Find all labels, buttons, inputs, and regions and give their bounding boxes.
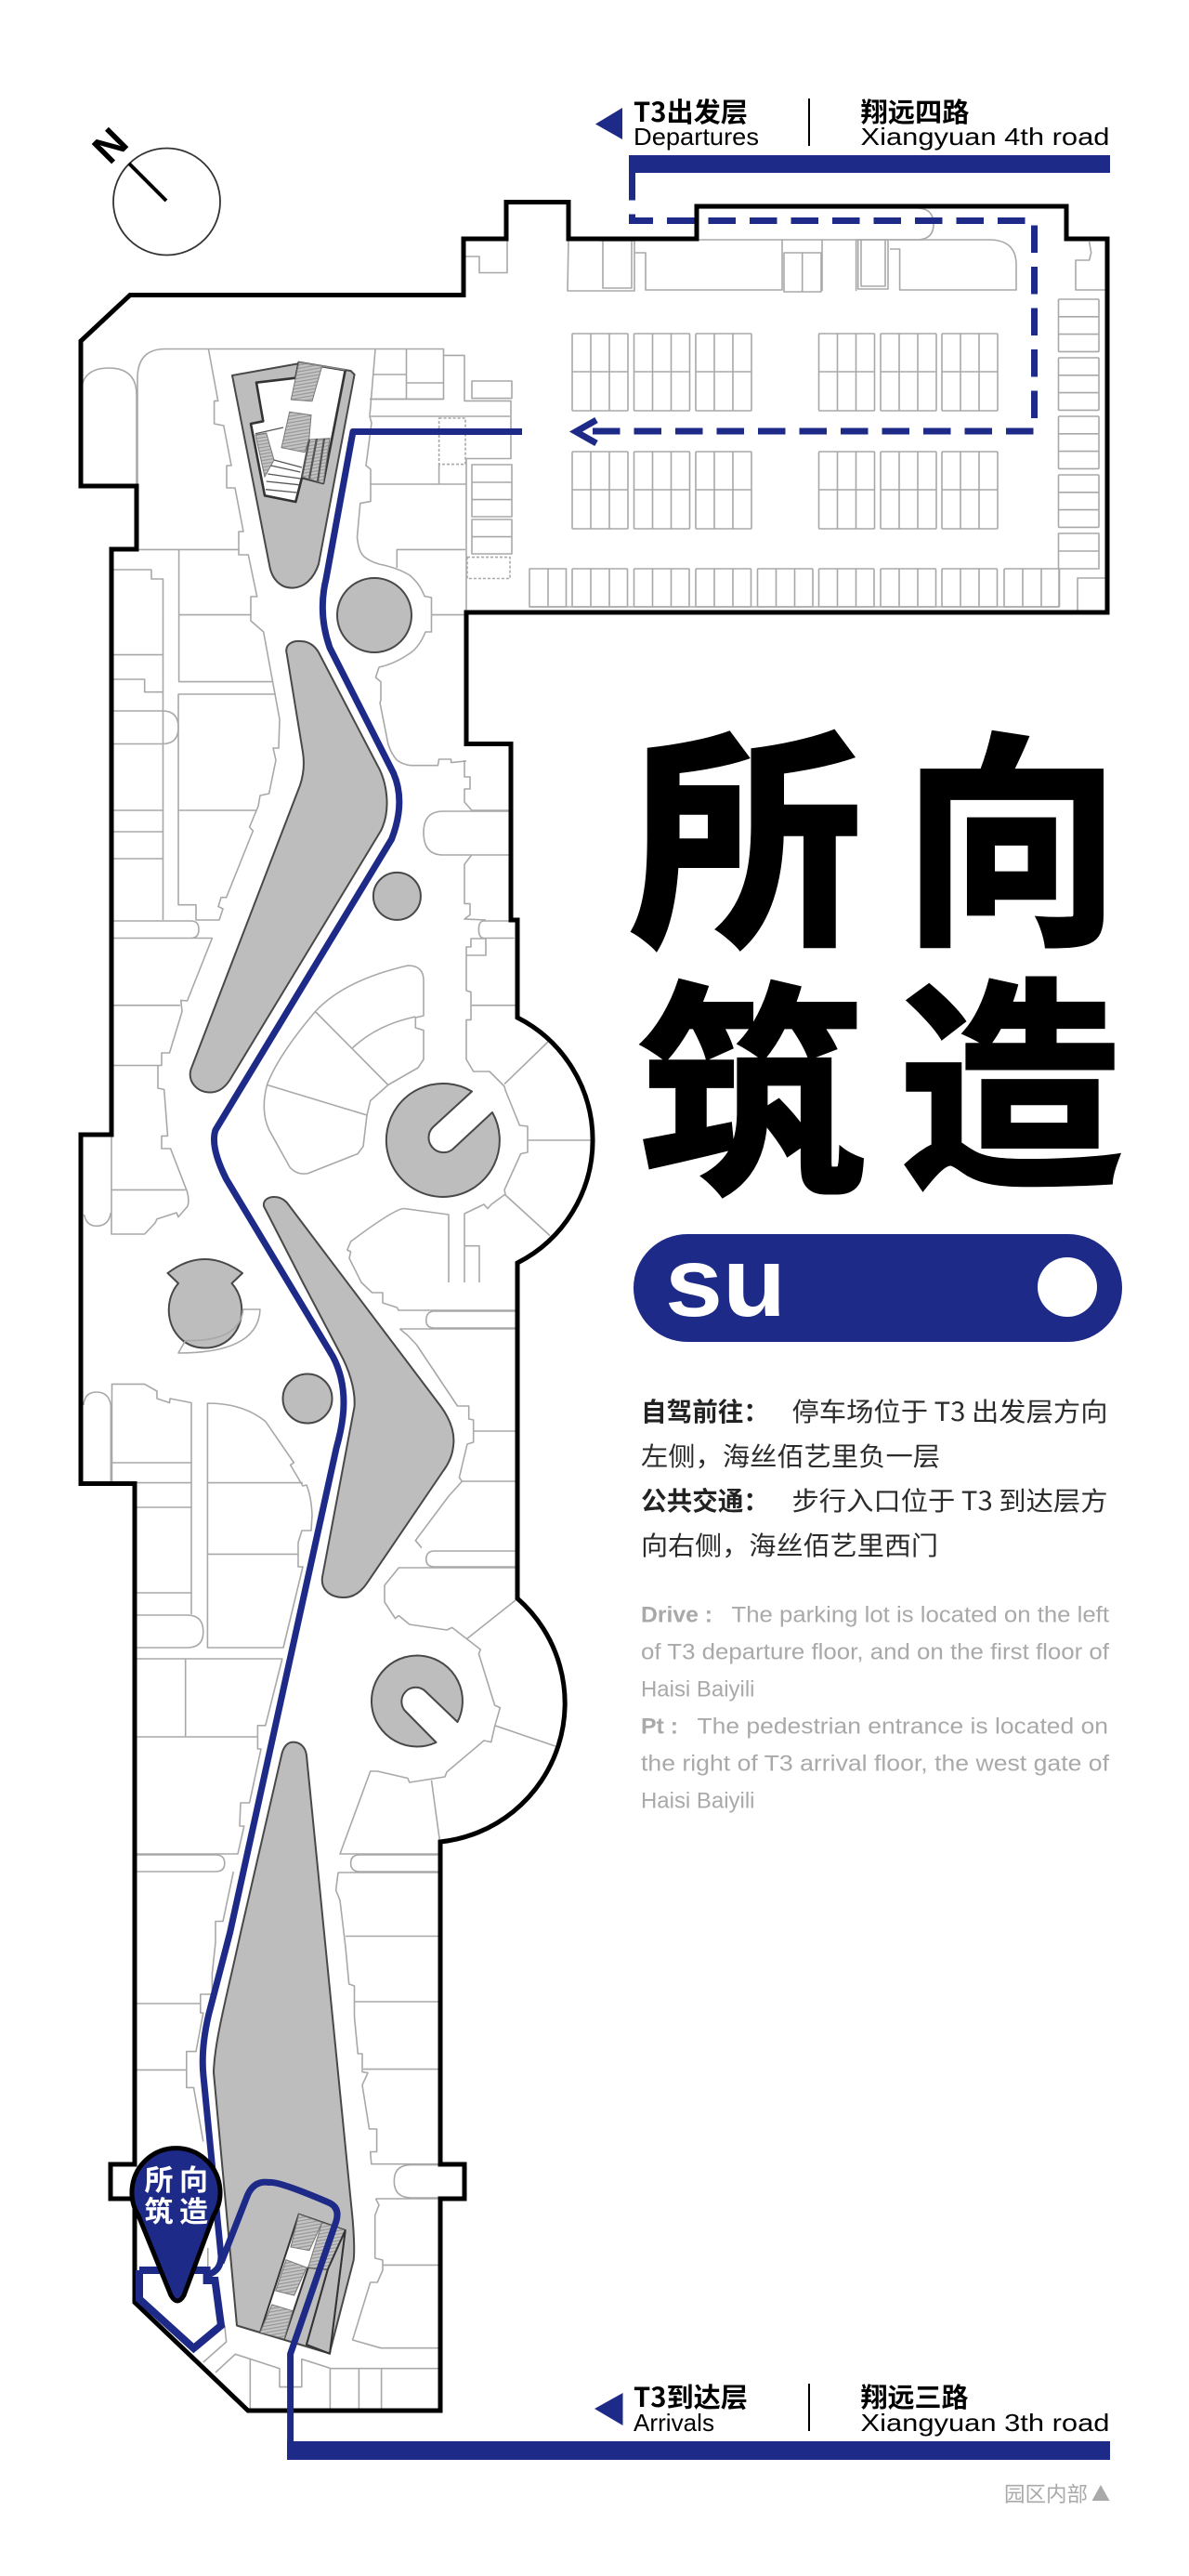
chinese directions text: 步行入口位于 T3 到达层方 — [791, 1481, 1107, 1518]
east pills and units — [399, 1311, 516, 1567]
atrium boomerang: upper — [190, 641, 387, 1093]
route: arrivals walking path — [221, 2182, 337, 2446]
building outline — [81, 203, 1107, 2411]
map pin: 所向筑造: 筑 — [145, 2188, 173, 2230]
english directions text — [641, 1602, 1109, 1814]
atrium long island: south with stairs — [214, 1742, 354, 2354]
title: 所向筑造: 筑 — [638, 913, 865, 1242]
chinese directions text: 向右侧，海丝佰艺里西门 — [641, 1526, 938, 1563]
compass: north indicator — [84, 119, 220, 255]
chinese directions text — [641, 1392, 1107, 1563]
north west block — [81, 368, 137, 486]
english directions text: Pt : — [641, 1714, 678, 1740]
atrium circle: north — [337, 578, 412, 652]
atrium round with notch: west — [167, 1259, 242, 1347]
atrium island: north with stairs — [232, 362, 355, 588]
english directions text: The pedestrian entrance is located on — [697, 1714, 1108, 1740]
note: park interior: 园区内部 — [1004, 2478, 1088, 2508]
map pin: 所向筑造 — [132, 2149, 220, 2301]
map pin: 所向筑造: 所 — [145, 2157, 173, 2199]
english directions text: Haisi Baiyili — [641, 1788, 754, 1814]
english directions text: The parking lot is located on the left — [732, 1602, 1109, 1628]
compass: north indicator: N — [84, 119, 137, 173]
road label: 翔远三路: 翔远三路 — [860, 2376, 968, 2415]
road label: 翔远四路: Xiangyuan 4th road — [860, 123, 1109, 151]
parking bays — [529, 299, 1107, 612]
south end units — [203, 2248, 439, 2411]
road label: 翔远三路: Xiangyuan 3th road — [860, 2409, 1109, 2437]
departures label: Departures — [634, 123, 759, 151]
departures label — [595, 91, 759, 151]
atrium circle: south small — [282, 1373, 333, 1424]
chinese directions text: 自驾前往： — [641, 1392, 769, 1429]
arrivals label: Arrivals — [634, 2409, 714, 2437]
arrivals label — [594, 2376, 748, 2437]
curved ledge around west atrium — [178, 1309, 260, 1353]
atrium circle: small — [373, 873, 421, 920]
su badge pill: su — [665, 1228, 786, 1337]
central fan shaped shops — [264, 966, 424, 1174]
su badge pill — [634, 1228, 1122, 1342]
english directions text: of T3 departure floor, and on the first floor of — [641, 1639, 1109, 1665]
title: 所向筑造: 造 — [898, 911, 1122, 1233]
english directions text: Haisi Baiyili — [641, 1676, 754, 1702]
english directions text: Drive : — [641, 1602, 712, 1628]
english directions text: the right of T3 arrival floor, the west gate of — [641, 1751, 1109, 1777]
chinese directions text: 左侧，海丝佰艺里负一层 — [641, 1437, 940, 1474]
arrivals label: T3到达层 — [634, 2376, 748, 2415]
road label: 翔远三路 — [860, 2376, 1109, 2437]
chinese directions text: 公共交通： — [641, 1481, 769, 1518]
divider bottom — [808, 2384, 810, 2431]
departures label: T3出发层 — [634, 91, 748, 130]
chinese directions text: 停车场位于 T3 出发层方向 — [791, 1392, 1107, 1429]
east side blocks — [424, 760, 509, 920]
title: 所向筑造: 所 — [630, 657, 862, 993]
map pin: 所向筑造: 向 — [179, 2157, 208, 2199]
west lower blocks — [84, 1392, 111, 1481]
road label: 翔远四路: 翔远四路 — [860, 91, 970, 130]
title: 所向筑造: 向 — [904, 663, 1119, 992]
road bar: Xiangyuan 3th road — [287, 2441, 1110, 2460]
title: 所向筑造 — [630, 657, 1122, 1242]
parking north side rooms — [697, 208, 934, 240]
atrium round with slot: east — [386, 1084, 500, 1197]
north east block — [357, 349, 466, 766]
atrium boomerang: middle — [264, 1197, 453, 1597]
map pin: 所向筑造: 造 — [179, 2188, 208, 2230]
atrium round with slot: south east — [372, 1656, 463, 1747]
route: driving dashed path with arrow — [203, 173, 1035, 2275]
floor plan: thin unit lines — [81, 208, 1107, 2411]
road label: 翔远四路 — [860, 91, 1109, 151]
road bar: Xiangyuan 4th road — [629, 155, 1110, 173]
divider top — [808, 99, 810, 146]
destination shop outline — [139, 2270, 221, 2348]
